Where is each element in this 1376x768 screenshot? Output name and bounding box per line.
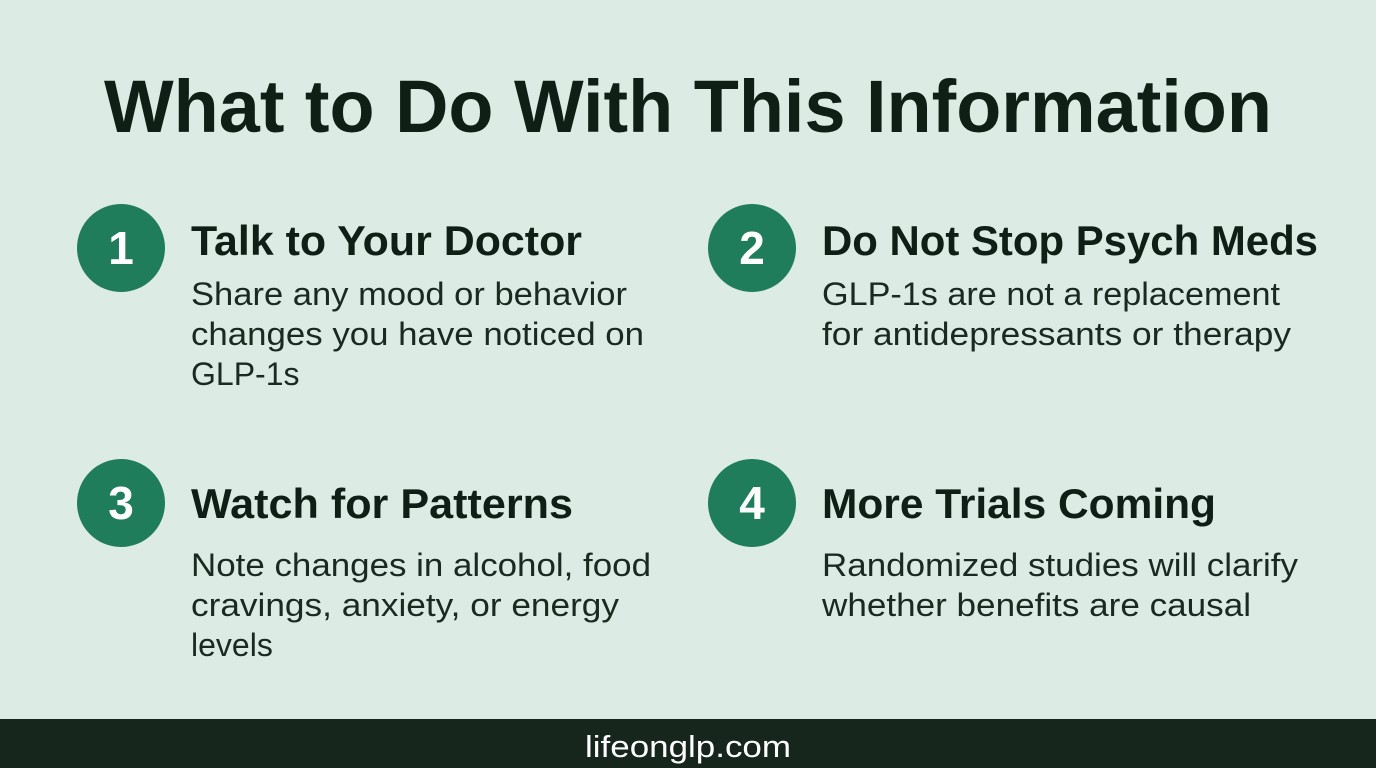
body 3: cravings, anxiety, or energy <box>191 587 619 623</box>
body 1: changes you have noticed on <box>191 316 644 352</box>
icon: number 2 circle: 2 <box>739 222 765 274</box>
body 4: Randomized studies will clarify <box>822 547 1298 583</box>
title: What to Do With This Information <box>104 65 1272 148</box>
item 3: watch for patterns <box>77 459 651 663</box>
body 3: levels <box>191 627 273 663</box>
heading 2: Do Not Stop Psych Meds <box>822 217 1318 264</box>
footer <box>0 719 1376 768</box>
body 2: GLP-1s are not a replacement <box>822 276 1280 312</box>
body 1: GLP-1s <box>191 356 299 392</box>
heading 4: More Trials Coming <box>822 480 1216 527</box>
icon: number 4 circle <box>708 459 796 547</box>
body 2: for antidepressants or therapy <box>822 316 1291 352</box>
heading 1: Talk to Your Doctor <box>191 217 582 264</box>
body 1: Share any mood or behavior <box>191 276 627 312</box>
body 2 <box>822 276 1291 352</box>
body 1 <box>191 276 644 392</box>
footer: lifeonglp.com <box>585 729 791 764</box>
item 1: talk to your doctor <box>77 204 644 392</box>
body 4 <box>821 547 1298 623</box>
body 3: Note changes in alcohol, food <box>191 547 651 583</box>
icon: number 3 circle: 3 <box>108 477 134 529</box>
item 2: do not stop psych meds <box>708 204 1318 352</box>
icon: number 1 circle <box>77 204 165 292</box>
body 3 <box>191 547 651 663</box>
item 4: more trials coming <box>708 459 1298 623</box>
icon: number 3 circle <box>77 459 165 547</box>
icon: number 4 circle: 4 <box>739 477 765 529</box>
body 4: whether benefits are causal <box>821 587 1251 623</box>
icon: number 1 circle: 1 <box>108 222 134 274</box>
icon: number 2 circle <box>708 204 796 292</box>
heading 3: Watch for Patterns <box>191 480 573 527</box>
